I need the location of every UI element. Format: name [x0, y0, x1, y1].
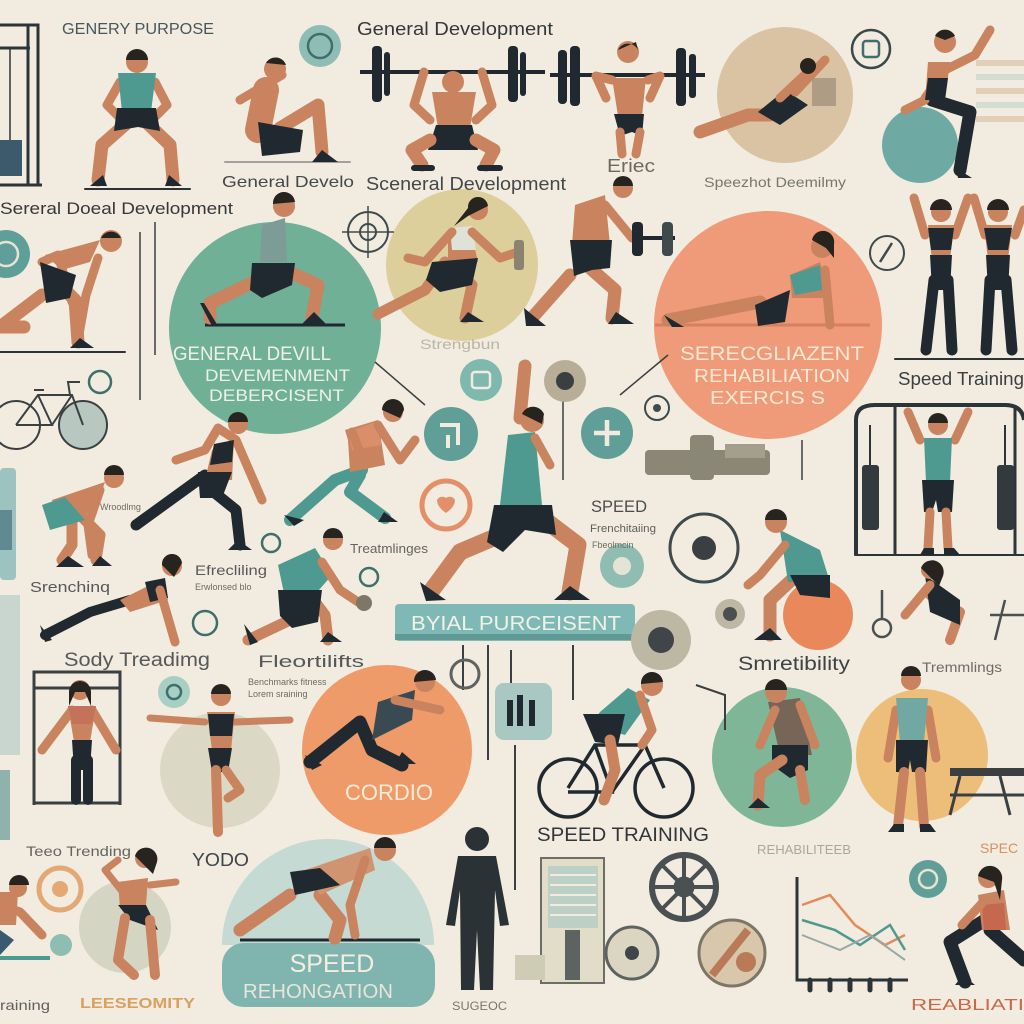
icon: heart circle	[422, 481, 470, 529]
label: general development left: Sereral Doeal Development	[0, 199, 233, 218]
vertical arrows	[463, 645, 725, 890]
green circle text: DEBERCISENT	[209, 386, 344, 405]
fragments lower left woman	[0, 875, 50, 958]
woman lower left standing	[105, 848, 176, 975]
label: rehabilitation orange: REABLIATI	[911, 997, 1024, 1014]
label: treatment: Treatmlinges	[350, 541, 429, 556]
bike icon left	[0, 382, 107, 449]
label: training bottom left: raining	[0, 997, 50, 1013]
panel: khaki circle strength	[386, 189, 538, 341]
label: teen treading: Teeo Trending	[26, 843, 131, 859]
barbell lift woman	[550, 41, 705, 154]
icon: rehab figure in circle	[699, 920, 765, 986]
man in green circle	[748, 679, 815, 808]
panel: yellow circle lower right	[856, 689, 988, 821]
woman lying in orange circle	[655, 231, 870, 327]
icon: ring below banner	[451, 660, 479, 688]
panel: green circle lower right	[712, 687, 852, 827]
label: speed: SPEED	[591, 497, 647, 516]
panel: grey circle lower left	[79, 881, 171, 973]
running woman in khaki circle	[378, 197, 524, 322]
icon: teal ring left	[0, 230, 30, 278]
small text clusters: Erwlonsed blo	[195, 582, 252, 592]
balance woman	[150, 684, 290, 832]
label: responsibility orange: LEESEOMITY	[80, 995, 195, 1012]
icon: plus circle	[581, 407, 633, 459]
squatting woman right	[905, 560, 960, 640]
kneeling man teal shirt	[244, 528, 372, 645]
icon: small face	[645, 396, 669, 420]
cyclist	[539, 672, 693, 817]
text: cardio: CORDIO	[345, 780, 433, 805]
runner woman teal	[284, 399, 415, 526]
label: bottom sub text: SUGEOC	[452, 999, 507, 1013]
orange circle text	[680, 344, 864, 408]
icon: teal circle left	[424, 407, 478, 461]
label: rehabilitation faded: REHABILITEEB	[757, 842, 851, 857]
label: treadmill small: Frenchitaiing	[590, 523, 656, 535]
icon: small ring	[89, 371, 111, 393]
label: Eriec: Eriec	[607, 156, 655, 176]
green circle text: DEVEMENMENT	[205, 366, 350, 385]
decorative stripes right	[976, 60, 1024, 122]
label: speed training: Speed Training	[898, 369, 1024, 389]
label: body training: Sody Treadimg	[64, 650, 210, 671]
icon: dark ring	[631, 610, 691, 670]
green circle text	[173, 344, 350, 405]
icon: top circle	[299, 25, 341, 67]
icon: teal target lower right	[909, 860, 947, 898]
banner: typical purpose: BYIAL PURCEISENT	[411, 613, 621, 635]
small text clusters	[100, 502, 634, 699]
orange circle text: SERECGLIAZENT	[680, 344, 864, 365]
man stretching on dome	[240, 837, 420, 940]
label: speed training: SPEED TRAINING	[537, 825, 709, 846]
label: strength: Strengbun	[420, 336, 500, 352]
panel: speed rehabilitation dome: REHONGATION	[243, 981, 393, 1003]
kneeling man left	[0, 230, 125, 352]
panel: speed rehabilitation dome: SPEED	[290, 950, 374, 978]
icon: target top right	[852, 30, 890, 68]
icon: plate round	[606, 927, 658, 979]
man on orange ball	[748, 509, 853, 650]
panel: orange circle rehabilitation	[654, 211, 882, 439]
bench right	[950, 768, 1024, 815]
running man with dumbbell	[524, 176, 675, 326]
gym frame with man	[855, 405, 1024, 555]
treadmill machine	[515, 858, 604, 983]
label: effective: Efrecliling	[195, 562, 267, 578]
situp man	[225, 57, 350, 162]
panel: tan circle top right	[717, 27, 853, 163]
line chart	[797, 877, 908, 990]
panel: green circle general development	[169, 222, 381, 434]
heading: general development top: General Development	[357, 19, 553, 39]
icon: side tool right	[873, 590, 1024, 640]
woman at rack	[34, 672, 120, 805]
panel: orange circle cardio	[302, 665, 472, 835]
label: stretchability: Smretibility	[738, 654, 851, 675]
barbell squat man	[360, 46, 545, 168]
icon: grey circle	[544, 360, 586, 402]
sprinter in cardio circle	[305, 670, 440, 770]
left edge machine	[0, 468, 20, 840]
small text clusters: Fbeolmcin	[592, 540, 634, 550]
label: general develo: General Develo	[222, 174, 354, 191]
small text clusters: Benchmarks fitness	[248, 677, 327, 687]
machine grey	[645, 435, 770, 480]
small text clusters: Lorem sraining	[248, 689, 308, 699]
icon: small circles mid-left	[193, 534, 378, 635]
heading: general purpose: GENERY PURPOSE	[62, 21, 214, 38]
gym rack top left	[0, 25, 42, 185]
woman standing yellow circle	[888, 666, 936, 832]
plank woman	[40, 554, 182, 642]
label: general development middle: Sceneral Development	[366, 174, 566, 194]
label: strengthening: Srenchinq	[30, 579, 110, 596]
two women standing	[895, 198, 1024, 359]
icon: small grey ring	[715, 599, 745, 629]
label: speed orange: SPEC	[980, 840, 1018, 856]
icon: small teal ring	[158, 676, 190, 708]
squat man top left	[85, 49, 190, 189]
icon: teal circle upper centre	[460, 359, 502, 401]
central lunge figure	[420, 366, 590, 601]
connector lines	[140, 222, 802, 480]
green circle text: GENERAL DEVILL	[173, 344, 331, 365]
icon: rounded square	[495, 683, 552, 740]
small text clusters: Wroodlmg	[100, 502, 141, 512]
panel: grey circle yoga	[160, 712, 280, 828]
diving woman in tan circle	[700, 58, 836, 132]
panel: speed rehabilitation dome	[222, 839, 435, 1007]
woman on teal ball	[882, 30, 990, 183]
orange circle text: REHABILIATION	[694, 366, 850, 386]
label: yoga: YODO	[192, 850, 249, 870]
icon: orange ring lower left	[39, 868, 81, 910]
banner: typical purpose	[395, 604, 635, 641]
bending man left	[42, 465, 124, 567]
runner left	[136, 412, 262, 550]
icon: teal small circle	[600, 544, 644, 588]
icon: large ring centre right	[670, 514, 738, 582]
lunge man in green circle	[200, 192, 345, 326]
silhouette person	[446, 827, 509, 990]
target icon	[342, 206, 394, 258]
label: flexibility: Fleortilifts	[258, 652, 364, 671]
label: training right: Tremmlings	[922, 659, 1002, 675]
icon: teal small lower left	[50, 934, 72, 956]
orange circle text: EXERCIS S	[710, 388, 825, 408]
icon: ring small	[870, 236, 904, 270]
icon: weight plate	[652, 855, 716, 919]
label: specialist development: Speezhot Deemilmy	[704, 174, 846, 190]
woman lunging lower right	[950, 866, 1024, 985]
